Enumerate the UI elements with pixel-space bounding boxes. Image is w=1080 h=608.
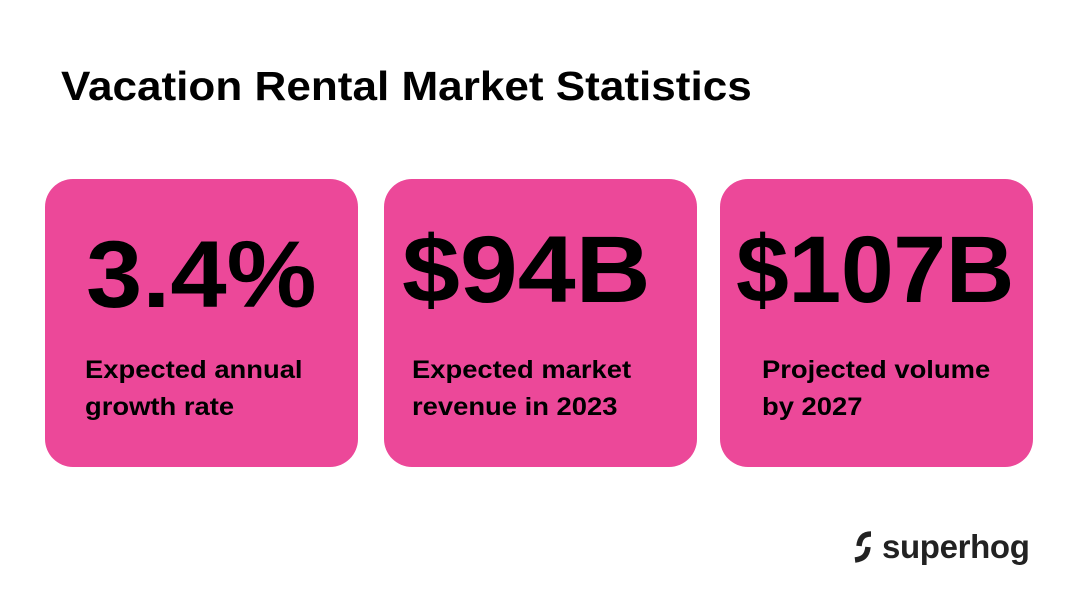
panel: annual growth rate — [45, 179, 358, 467]
icon: superhog mark — [854, 531, 871, 563]
label: expected market revenue: Expected market — [412, 356, 631, 384]
label: expected market revenue: revenue in 2023 — [412, 393, 617, 421]
label: expected annual growth rate: growth rate — [85, 393, 234, 421]
label: projected volume — [762, 356, 990, 421]
label: expected annual growth rate — [85, 356, 303, 421]
panel: market revenue — [384, 179, 697, 467]
stat: $107B: $107B — [736, 217, 1014, 323]
stat: 3.4%: 3.4% — [86, 222, 317, 328]
wordmark: superhog — [882, 528, 1030, 565]
panel: projected volume — [720, 179, 1033, 467]
label: projected volume: Projected volume — [762, 356, 990, 384]
label: expected annual growth rate: Expected annual — [85, 356, 303, 384]
title: Vacation Rental Market Statistics — [61, 63, 752, 109]
logo: superhog — [854, 528, 1030, 565]
stat: $94B: $94B — [402, 217, 651, 323]
label: projected volume: by 2027 — [762, 393, 862, 421]
label: expected market revenue — [412, 356, 631, 421]
